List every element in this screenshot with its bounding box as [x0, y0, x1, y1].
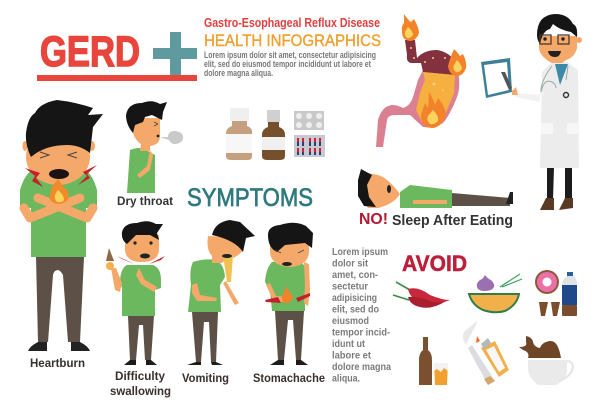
- icon: onion: [477, 274, 522, 291]
- figure: stomachache man: [265, 223, 313, 365]
- icon: donut: [535, 270, 559, 294]
- icon: soft drink glasses: [539, 302, 560, 316]
- figure: sleeping man: [358, 169, 513, 208]
- heading: disease name and description: Gastro-Esophageal Reflux Disease: [204, 15, 380, 30]
- icon: alcohol bottle and glass: [419, 337, 448, 385]
- label: no sleep after eating: Sleep After Eating: [392, 212, 513, 229]
- text block: lorem ipsum: aliqua.: [332, 374, 360, 384]
- figure: heartburn man: [20, 100, 103, 351]
- heading: avoid: AVOID: [402, 251, 467, 276]
- label: no sleep after eating: NO!: [359, 211, 388, 228]
- figure: dry throat man: [126, 101, 183, 193]
- text block: lorem ipsum: sectetur: [332, 282, 368, 292]
- icon: soda bottle: [562, 272, 577, 316]
- text block: lorem ipsum: tempor incid-: [332, 328, 390, 338]
- heading: disease name and description: dolore magna aliqua.: [204, 68, 273, 79]
- heading: disease name and description: Lorem ipsum dolor sit amet, consectetur adipisicing: [204, 50, 376, 61]
- icon: flame bottom: [421, 92, 446, 128]
- label: difficulty swallowing: [110, 369, 171, 398]
- text block: lorem ipsum: [332, 247, 391, 384]
- heading: symptoms: SYMPTOMS: [187, 184, 313, 212]
- icon: white tablets: [294, 111, 324, 130]
- figure: vomiting man: [187, 220, 255, 365]
- figure: difficulty swallowing man: [106, 221, 165, 365]
- text block: lorem ipsum: idunt ut: [332, 339, 366, 350]
- text block: lorem ipsum: elit, sed do: [332, 304, 379, 316]
- text block: lorem ipsum: amet, con-: [332, 270, 378, 281]
- label: vomiting: Vomiting: [182, 371, 229, 385]
- text block: lorem ipsum: Lorem ipsum: [332, 247, 388, 258]
- icon: syrup bottle: [262, 110, 285, 160]
- text block: lorem ipsum: dolore magna: [332, 362, 391, 373]
- label: heartburn: Heartburn: [30, 356, 85, 370]
- heading: disease name and description: [204, 15, 381, 79]
- heading: disease name and description: elit, sed do eiusmod tempor incididunt ut labore et: [204, 59, 372, 70]
- figure: doctor: [481, 14, 582, 210]
- diagram: burning stomach: [376, 14, 466, 147]
- icon: cigarette and lighter: [463, 320, 509, 385]
- icon: durian: [469, 294, 519, 312]
- icon: chilli peppers: [393, 282, 450, 308]
- icon: capsule blister: [294, 135, 325, 157]
- icon: flame right: [448, 49, 466, 76]
- text block: lorem ipsum: eiusmod: [332, 316, 369, 327]
- text block: lorem ipsum: adipisicing: [332, 293, 377, 304]
- icon: spilling coffee cup: [519, 336, 573, 385]
- label: stomachache: Stomachache: [253, 371, 325, 385]
- heading: disease name and description: HEALTH INFOGRAPHICS: [204, 31, 381, 50]
- text block: lorem ipsum: dolor sit: [332, 258, 369, 270]
- text block: lorem ipsum: labore et: [332, 350, 372, 362]
- icon group: medicine: [226, 108, 325, 160]
- title: GERD logo: GERD: [40, 28, 140, 76]
- icon: pill jar: [226, 108, 252, 160]
- label: difficulty swallowing: swallowing: [110, 384, 171, 398]
- icon: clipboard: [481, 58, 512, 98]
- label: difficulty swallowing: Difficulty: [115, 369, 165, 383]
- icon: flame top: [402, 14, 419, 41]
- label: dry throat: Dry throat: [117, 194, 173, 208]
